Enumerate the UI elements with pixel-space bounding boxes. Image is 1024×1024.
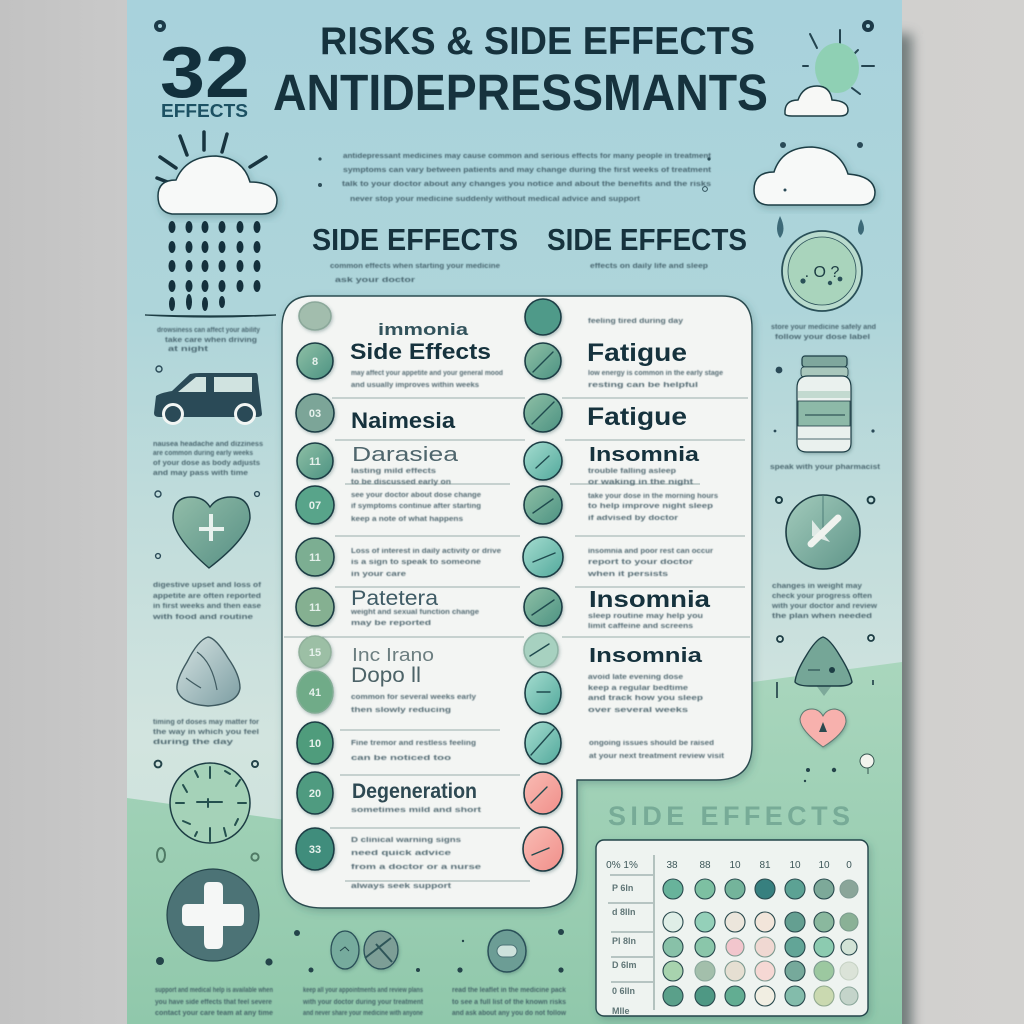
right list headings: Fatigue <box>587 339 687 367</box>
bottom pill icons <box>331 931 398 969</box>
side caption: car <box>153 441 263 477</box>
side caption: clock <box>153 719 259 746</box>
left pill numbers: 07 <box>309 500 321 512</box>
faded heading: side effects: SIDE EFFECTS <box>608 801 850 831</box>
icon: cloud with sun rays and rain, top left <box>145 132 277 317</box>
right list details: at your next treatment review visit <box>589 753 725 760</box>
left list details: see your doctor about dose change <box>351 492 481 499</box>
row dividers <box>284 398 750 881</box>
table row labels <box>612 883 637 1016</box>
table row labels: Pl 8ln <box>612 936 636 946</box>
right list headings: Insomnia <box>589 645 703 667</box>
left list details: from a doctor or a nurse <box>351 864 481 871</box>
side caption: heart: in first weeks and then ease <box>153 603 261 610</box>
side caption: heart: with food and routine <box>152 614 253 621</box>
left list details: may be reported <box>351 620 431 627</box>
right list details: to help improve night sleep <box>588 503 713 510</box>
side caption: right mid <box>771 583 878 620</box>
left list details: if symptoms continue after starting <box>351 503 481 510</box>
side caption: heart <box>152 582 262 621</box>
icon: pink heart <box>800 709 846 747</box>
right list headings <box>587 339 710 667</box>
left pills <box>296 302 334 870</box>
table panel: effects by medicine <box>596 840 868 1016</box>
bottom caption middle: and never share your medicine with anyone <box>303 1010 423 1017</box>
headings: side effects: SIDE EFFECTS <box>312 222 518 257</box>
left list details: in your care <box>351 571 406 578</box>
bottom caption left: support and medical help is available when <box>155 987 273 994</box>
pins <box>154 20 874 32</box>
side caption: upper right <box>771 324 876 341</box>
left list details: D clinical warning signs <box>351 837 461 844</box>
title: RISKS & SIDE EFFECTS <box>320 20 755 63</box>
side caption: right mid: with your doctor and review <box>771 603 878 610</box>
right list headings: Insomnia <box>589 444 700 466</box>
left list details: is a sign to speak to someone <box>351 559 481 566</box>
intro paragraph: symptoms can vary between patients and may change during the first weeks of treatment <box>343 167 712 174</box>
right pills <box>523 299 563 871</box>
icon: triangle pill <box>777 635 874 698</box>
left list headings: immonia <box>378 320 469 339</box>
right list details: limit caffeine and screens <box>588 623 693 630</box>
icon: sun behind cloud, top right <box>785 30 874 116</box>
side caption: upper left <box>157 327 260 353</box>
side caption: upper right: follow your dose label <box>775 334 870 341</box>
bottom caption left: you have side effects that feel severe <box>155 999 272 1006</box>
side caption: clock: the way in which you feel <box>153 729 259 736</box>
icon: car <box>154 366 262 424</box>
main panel: side effects list <box>282 296 752 908</box>
left list details: lasting mild effects <box>351 468 436 475</box>
side caption: right mid: check your progress often <box>772 593 872 600</box>
right list details: report to your doctor <box>588 559 693 566</box>
table header: 0% 1% <box>606 860 638 871</box>
side caption: car: of your dose as body adjusts <box>153 460 260 467</box>
left list headings: Dopo ll <box>351 664 421 687</box>
left list details: and usually improves within weeks <box>351 382 479 389</box>
right list details: sleep routine may help you <box>588 613 703 620</box>
pill score lines <box>530 352 555 855</box>
left pill numbers: 03 <box>309 408 321 420</box>
table rules <box>608 855 654 1010</box>
left pill numbers: 20 <box>309 788 321 800</box>
table dots <box>663 879 858 1006</box>
left list details: Fine tremor and restless feeling <box>351 740 476 747</box>
left pill numbers <box>309 356 321 856</box>
bottom caption middle: keep all your appointments and review plans <box>303 987 423 994</box>
sub heading text: common effects when starting your medicine <box>330 263 500 270</box>
bottom round pill icon <box>488 930 526 972</box>
side caption: upper left: at night <box>168 346 209 353</box>
right list headings: Fatigue <box>587 403 687 431</box>
intro paragraph: never stop your medicine suddenly without medical advice and support <box>350 196 641 203</box>
left pill numbers: 11 <box>309 552 321 564</box>
side caption: upper left: drowsiness can affect your ability <box>157 327 260 334</box>
table row labels: P 6ln <box>612 883 633 893</box>
bottom pill dots <box>294 929 564 973</box>
left list details: always seek support <box>351 883 452 890</box>
side caption: car: nausea headache and dizziness <box>153 441 263 448</box>
right list details: avoid late evening dose <box>588 674 683 681</box>
right list details: resting can be helpful <box>588 382 698 389</box>
icon: medicine bottle <box>797 356 851 452</box>
sub heading text: ask your doctor <box>335 277 415 284</box>
badge: 32 effects: 32 <box>160 33 250 113</box>
rain drops <box>145 221 276 317</box>
bottom caption middle <box>302 987 424 1017</box>
poster background <box>127 0 902 1024</box>
left list headings: Inc Irano <box>352 645 434 665</box>
intro dots <box>318 157 711 191</box>
right list details: keep a regular bedtime <box>588 685 688 692</box>
left list headings: Side Effects <box>350 339 491 364</box>
bottom caption right <box>452 987 567 1017</box>
right list details: and track how you sleep <box>588 695 703 702</box>
left list details: need quick advice <box>351 850 451 857</box>
left list headings: Patetera <box>351 587 438 610</box>
badge: 32 effects: EFFECTS <box>161 101 248 121</box>
table header: 10 <box>729 860 741 871</box>
left list details: common for several weeks early <box>351 694 476 701</box>
left pill numbers: 33 <box>309 844 321 856</box>
bottom caption right: read the leaflet in the medicine pack <box>452 987 566 994</box>
icon: round green badge, right: . O ? <box>805 264 839 281</box>
icon: round pill with cross <box>776 495 874 569</box>
title <box>273 20 768 121</box>
side caption: upper left: take care when driving <box>165 337 257 344</box>
sub heading text: effects on daily life and sleep <box>590 263 708 270</box>
right list details: trouble falling asleep <box>588 468 676 475</box>
left pill numbers: 41 <box>309 687 321 699</box>
right list details: insomnia and poor rest can occur <box>588 548 713 555</box>
side caption: upper right: store your medicine safely and <box>771 324 876 331</box>
bottom caption left <box>155 987 273 1017</box>
left list headings: Darasiea <box>352 444 459 466</box>
right list details: if advised by doctor <box>588 515 678 522</box>
left list details: may affect your appetite and your general mood <box>351 370 503 377</box>
table header: 81 <box>759 860 771 871</box>
left list details: can be noticed too <box>351 755 451 762</box>
bottle dots <box>774 367 875 433</box>
table row labels: d 8lln <box>612 907 636 917</box>
table row labels: Mlle <box>612 1006 630 1016</box>
side caption: right mid: the plan when needed <box>772 613 872 620</box>
table header: 10 <box>818 860 830 871</box>
icon: small white bulb <box>804 754 874 782</box>
side caption: heart: digestive upset and loss of <box>153 582 262 589</box>
bottom caption left: contact your care team at any time <box>155 1010 273 1017</box>
intro paragraph: talk to your doctor about any changes you notice and about the benefits and the risks <box>342 181 711 188</box>
icon: heart with plus <box>155 491 259 568</box>
left list details: weight and sexual function change <box>350 609 479 616</box>
left pill numbers: 15 <box>309 647 321 659</box>
title: ANTIDEPRESSMANTS <box>273 64 768 121</box>
bottom caption right: and ask about any you do not follow <box>452 1010 567 1017</box>
intro paragraph: antidepressant medicines may cause common and serious effects for many people in treatment <box>343 153 712 160</box>
right list details: over several weeks <box>588 707 688 714</box>
right list details: ongoing issues should be raised <box>589 740 714 747</box>
left list details: sometimes mild and short <box>351 807 482 814</box>
intro paragraph <box>342 153 712 203</box>
table row labels: 0 6lln <box>612 986 635 996</box>
table header: 0 <box>846 860 852 871</box>
side caption: car: and may pass with time <box>153 470 248 477</box>
headings: side effects: SIDE EFFECTS <box>547 222 747 257</box>
table row labels: D 6lm <box>612 960 637 970</box>
left list details: then slowly reducing <box>351 707 451 714</box>
bottom caption right: to see a full list of the known risks <box>452 999 566 1006</box>
icon: clock <box>155 761 259 862</box>
right list details: low energy is common in the early stage <box>588 370 723 377</box>
icon: grey stone <box>177 637 240 706</box>
right list details: or waking in the night <box>588 479 694 486</box>
right list headings: Insomnia <box>589 586 710 612</box>
icon: round green badge, right <box>782 231 862 311</box>
right list details <box>586 318 725 760</box>
left pill numbers: 11 <box>309 602 321 614</box>
left list details: keep a note of what happens <box>351 516 463 523</box>
right list details: when it persists <box>586 571 668 578</box>
icon: plus circle <box>156 869 273 966</box>
side caption: heart: appetite are often reported <box>153 593 261 600</box>
side caption: bottle: speak with your pharmacist <box>770 464 881 471</box>
table header <box>606 860 852 871</box>
left pill numbers: 11 <box>309 456 321 468</box>
table header: 38 <box>666 860 678 871</box>
left list headings <box>350 320 491 803</box>
sub heading text <box>330 263 708 284</box>
left list headings: Naimesia <box>351 408 456 433</box>
left list headings: Degeneration <box>352 780 477 803</box>
table header: 88 <box>699 860 711 871</box>
left pill numbers: 8 <box>312 356 318 368</box>
headings: side effects <box>312 222 747 257</box>
side caption: right mid: changes in weight may <box>772 583 862 590</box>
left list details: to be discussed early on <box>351 479 451 486</box>
right list details: take your dose in the morning hours <box>588 493 718 500</box>
poster shadow <box>892 34 912 1024</box>
right list details: feeling tired during day <box>588 318 683 325</box>
side caption: clock: during the day <box>153 739 233 746</box>
side caption: clock: timing of doses may matter for <box>153 719 259 726</box>
side caption: car: are common during early weeks <box>153 450 253 457</box>
bottom caption middle: with your doctor during your treatment <box>302 999 424 1006</box>
icon: cloud, right <box>754 142 875 238</box>
left list details <box>350 370 503 890</box>
left pill numbers: 10 <box>309 738 321 750</box>
table header: 10 <box>789 860 801 871</box>
left list details: Loss of interest in daily activity or drive <box>351 548 501 555</box>
